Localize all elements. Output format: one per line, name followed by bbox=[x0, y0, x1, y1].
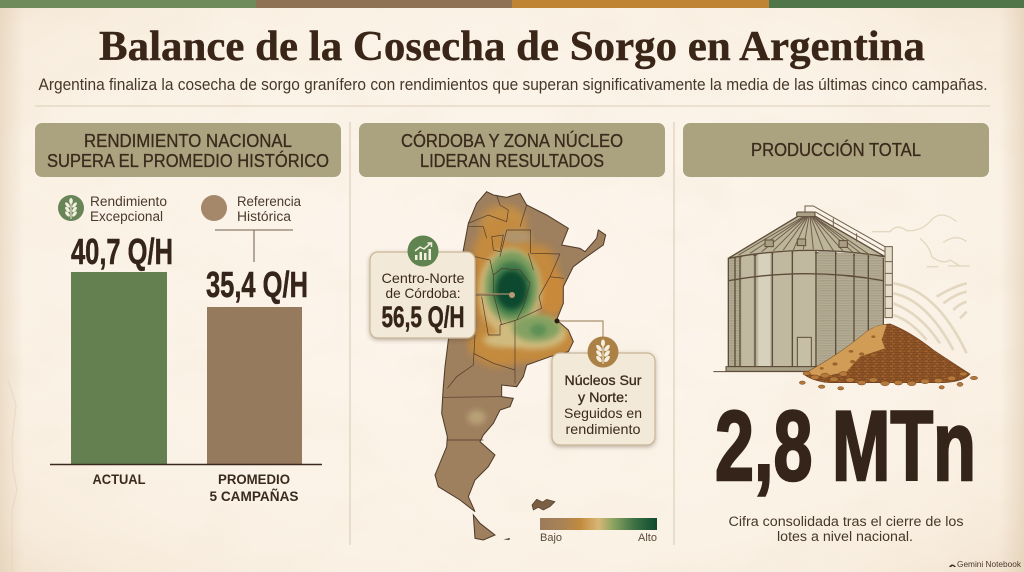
panel: cordoba bbox=[359, 123, 665, 544]
callout connector: nucleos bbox=[554, 318, 603, 340]
heading: cordoba: CÓRDOBA Y ZONA NÚCLEO bbox=[401, 130, 623, 151]
map legend bbox=[540, 518, 657, 544]
connector: historic reference bbox=[215, 230, 293, 262]
callout: nucleos sur y norte: Núcleos Sur bbox=[564, 372, 642, 388]
callout: nucleos sur y norte: rendimiento bbox=[566, 421, 641, 437]
illustration: silo bbox=[713, 206, 892, 372]
value: 35,4: 35,4 Q/H bbox=[206, 264, 308, 305]
legend: referencia historica: Referencia bbox=[237, 194, 301, 209]
bar label: promedio bbox=[210, 472, 298, 504]
bar label: actual: ACTUAL bbox=[92, 472, 146, 487]
panel: produccion total bbox=[683, 123, 989, 544]
heading: rendimiento nacional: SUPERA EL PROMEDIO HISTÓRICO bbox=[47, 150, 329, 171]
callout: centro-norte de cordoba: de Córdoba: bbox=[386, 285, 460, 301]
illustration: grain pile bbox=[799, 324, 978, 390]
icon: wheat on ochre circle bbox=[588, 336, 618, 368]
legend: referencia historica bbox=[237, 194, 301, 224]
heading: produccion total bbox=[683, 123, 989, 177]
map legend: Bajo bbox=[540, 532, 562, 544]
callout: centro-norte de cordoba: Centro-Norte bbox=[382, 270, 465, 286]
bar chart bbox=[50, 272, 322, 465]
icon: wheat on green circle bbox=[58, 195, 84, 221]
icon: growth chart bbox=[408, 236, 438, 266]
callout: centro-norte de cordoba: 56,5 Q/H bbox=[382, 301, 464, 334]
caption: Cifra consolidada tras el cierre de los bbox=[728, 514, 964, 529]
panel: rendimiento nacional bbox=[35, 123, 341, 504]
legend: referencia historica: Histórica bbox=[237, 209, 292, 224]
legend: rendimiento excepcional: Excepcional bbox=[90, 209, 163, 224]
heading: cordoba: LIDERAN RESULTADOS bbox=[420, 151, 604, 171]
heading: rendimiento nacional bbox=[35, 123, 341, 177]
heading: produccion total: PRODUCCIÓN TOTAL bbox=[751, 139, 921, 160]
callout: nucleos sur y norte: y Norte: bbox=[578, 389, 628, 405]
legend: rendimiento excepcional bbox=[90, 194, 167, 224]
map: argentina heatmap bbox=[427, 187, 613, 540]
icon: brown circle bbox=[201, 195, 227, 221]
top colour band bbox=[0, 0, 1024, 8]
callout connector: cordoba bbox=[475, 292, 515, 298]
bar label: promedio: PROMEDIO bbox=[218, 472, 290, 487]
map legend: Alto bbox=[638, 532, 657, 544]
watermark: gemini notebook: Gemini Notebook bbox=[957, 559, 1022, 569]
illustration: fields and clouds bbox=[872, 215, 970, 353]
legend: rendimiento excepcional: Rendimiento bbox=[90, 194, 167, 209]
callout: nucleos sur y norte: Seguidos en bbox=[564, 405, 642, 421]
callout: nucleos sur y norte bbox=[552, 353, 655, 445]
callout: centro-norte de cordoba bbox=[370, 252, 475, 338]
caption bbox=[728, 514, 964, 544]
subtitle: Argentina finaliza la cosecha de sorgo granífero con rendimientos que superan significativamente la media de las últimas cinco campañas. bbox=[38, 76, 988, 94]
bar label: promedio: 5 CAMPAÑAS bbox=[210, 489, 298, 504]
value: 40,7: 40,7 Q/H bbox=[71, 231, 173, 272]
caption: lotes a nivel nacional. bbox=[777, 529, 913, 544]
heading: rendimiento nacional: RENDIMIENTO NACIONAL bbox=[84, 131, 292, 151]
title: Balance de la Cosecha de Sorgo en Argentina bbox=[99, 24, 925, 70]
heading: cordoba bbox=[359, 123, 665, 177]
